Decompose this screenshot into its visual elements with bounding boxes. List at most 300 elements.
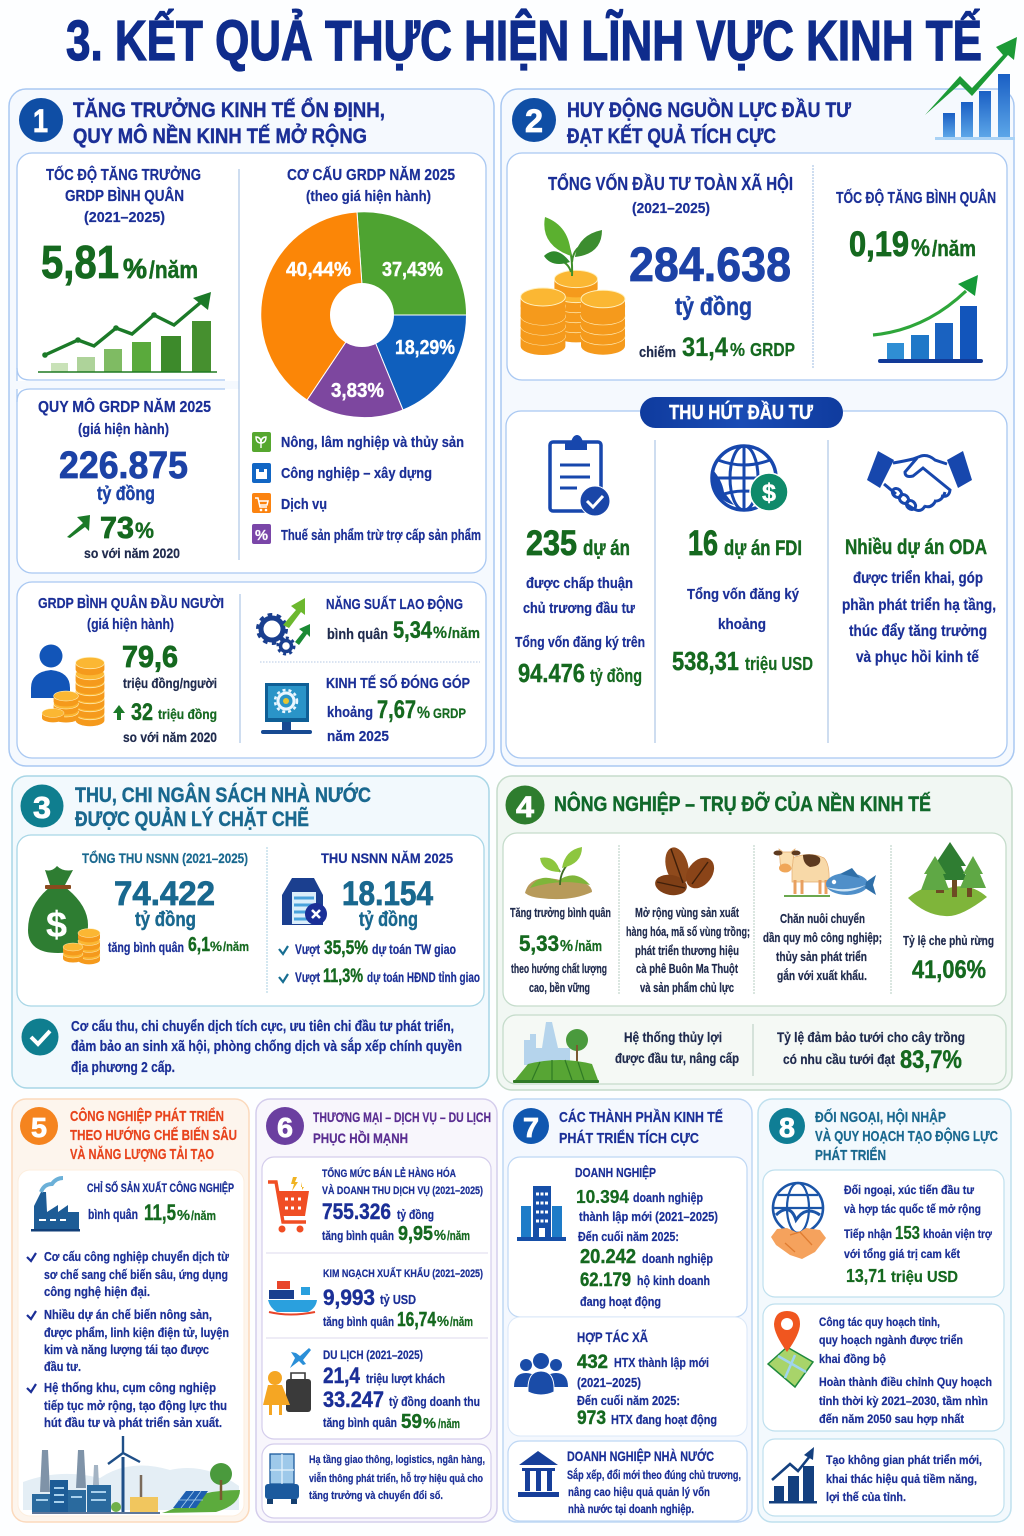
retail text: tăng bình quân [322, 1229, 394, 1243]
bullet list: Hệ thống khu, cụm công nghiệp [44, 1381, 216, 1395]
digital economy text: 7,67 [377, 696, 416, 724]
retail text: 755.326 [322, 1199, 391, 1224]
GRDP per capita block: GRDP BÌNH QUÂN ĐẦU NGƯỜI [38, 594, 224, 612]
export text: KIM NGẠCH XUẤT KHẨU (2021–2025) [323, 1267, 483, 1280]
pie chart: 40,44% [286, 259, 351, 281]
retail text: % [434, 1227, 446, 1244]
panel 5 heading: THEO HƯỚNG CHẾ BIẾN SÂU [70, 1126, 237, 1144]
state enterprises text: nhà nước tại doanh nghiệp. [568, 1504, 694, 1516]
total investment card: (2021–2025) [632, 201, 710, 217]
icon: irrigation landscape [513, 1022, 599, 1083]
gap between left cards [14, 169, 239, 560]
total investment card: TỔNG VỐN ĐẦU TƯ TOÀN XÃ HỘI [548, 173, 793, 194]
panel 6 heading: 6 [277, 1112, 293, 1143]
GRDP size block: QUY MÔ GRDP NĂM 2025 [38, 398, 211, 416]
2025 revenue text: THU NSNN NĂM 2025 [321, 850, 453, 866]
panel 6 heading [266, 1107, 491, 1146]
panel 8 heading: PHÁT TRIỂN [815, 1146, 886, 1164]
legend: Thuế sản phẩm trừ trợ cấp sản phẩm [281, 527, 481, 544]
industrial index text: bình quân [88, 1207, 138, 1222]
text: 16 FDI projects: 16 [688, 524, 718, 563]
lower card [17, 582, 486, 758]
main card [17, 153, 486, 573]
export text [323, 1267, 483, 1331]
panel 7 heading: CÁC THÀNH PHẦN KINH TẾ [559, 1109, 723, 1126]
development text: lợi thế của tỉnh. [826, 1490, 906, 1504]
icon: forest [908, 842, 987, 916]
panel 3 heading: ĐƯỢC QUẢN LÝ CHẶT CHẼ [75, 807, 309, 831]
digital economy text: năm 2025 [327, 728, 389, 745]
labour productivity text: /năm [448, 625, 480, 642]
export text: 16,74 [397, 1309, 437, 1331]
enterprises text: 20.242 [580, 1246, 636, 1268]
retail text: TỔNG MỨC BÁN LẺ HÀNG HÓA [322, 1167, 456, 1180]
text: irrigation: Tỷ lệ đảm bảo tưới cho cây trồng [777, 1029, 965, 1045]
foreign affairs text: triệu USD [891, 1269, 958, 1286]
text: agri growth: % [560, 938, 573, 955]
panel 5 background [12, 1099, 249, 1522]
text: 16 FDI projects: Tổng vốn đăng ký [687, 586, 800, 603]
panel 4 heading: NÔNG NGHIỆP – TRỤ ĐỠ CỦA NỀN KINH TẾ [554, 792, 931, 816]
text: coffee: hàng hóa, mã số vùng trồng; [626, 925, 750, 939]
icon: factory [31, 1178, 80, 1232]
text: 16 FDI projects: 538,31 [672, 646, 739, 676]
text: irrigation: có nhu cầu tưới đạt [783, 1051, 895, 1067]
total revenue text: TỔNG THU NSNN (2021–2025) [82, 849, 248, 866]
growth rate block: % [123, 253, 147, 284]
GRDP per capita block: 32 [131, 699, 153, 726]
legend [252, 432, 481, 544]
average growth block: /năm [932, 236, 976, 261]
panel 2 heading: HUY ĐỘNG NGUỒN LỰC ĐẦU TƯ [567, 98, 851, 122]
tourism text: triệu lượt khách [366, 1371, 445, 1386]
legend: % [255, 527, 268, 544]
enterprises text: doanh nghiệp [642, 1251, 713, 1266]
panel 1 heading [19, 98, 385, 148]
infrastructure text: viễn thông phát triển, hỗ trợ hiệu quả cho [309, 1472, 483, 1485]
panel 7 heading [513, 1108, 723, 1147]
tourism text: 59 [401, 1411, 422, 1433]
icon: gears and arrows [258, 598, 310, 654]
budget note text [71, 1019, 462, 1076]
text: agri growth: cao, bền vững [529, 981, 590, 995]
panel 5: industry [12, 1099, 249, 1522]
pie chart: 18,29% [395, 337, 455, 359]
text: ODA projects [842, 536, 996, 666]
infrastructure card [262, 1444, 491, 1518]
digital economy text [326, 674, 470, 745]
text: 16 FDI projects: triệu USD [745, 654, 813, 674]
2025 revenue text: tỷ đồng [359, 909, 418, 931]
panel 3 heading [20, 783, 371, 831]
industrial index text: % [177, 1207, 190, 1224]
text: livestock: thủy sản phát triển [776, 950, 867, 964]
panel 5 heading: CÔNG NGHIỆP PHÁT TRIỂN [70, 1107, 224, 1125]
text: livestock: dần quy mô công nghiệp; [763, 931, 882, 945]
tourism text: 21,4 [323, 1363, 361, 1388]
text: livestock [763, 912, 882, 983]
planning card [763, 1304, 1004, 1431]
growth rate block: TỐC ĐỘ TĂNG TRƯỞNG [46, 166, 201, 184]
pie chart: 37,43% [382, 259, 443, 281]
GRDP per capita block: so với năm 2020 [123, 729, 217, 745]
panel 4 heading [506, 786, 931, 824]
panel 2 heading: 2 [525, 103, 543, 139]
icon: monitor with gear [261, 683, 312, 734]
foreign affairs card [763, 1170, 1004, 1297]
panel 3 heading: THU, CHI NGÂN SÁCH NHÀ NƯỚC [75, 783, 371, 807]
digital economy text: GRDP [433, 705, 466, 721]
tourism text: 33.247 [323, 1387, 384, 1412]
trade card [262, 1157, 491, 1439]
pill label: attract investment: THU HÚT ĐẦU TƯ [669, 400, 813, 424]
tourism text: tăng bình quân [323, 1416, 397, 1430]
digital economy text: % [417, 703, 430, 722]
chart: blue bars with green arrow [873, 275, 983, 363]
icon: person with coins [31, 644, 104, 726]
text: ODA projects: thúc đẩy tăng trưởng [849, 623, 987, 640]
state enterprises text: Sắp xếp, đổi mới theo đúng chủ trương, [567, 1469, 741, 1482]
bullet list: kim và năng lượng tái tạo được [44, 1343, 209, 1357]
total investment card: % [730, 340, 745, 360]
text: ODA projects: Nhiều dự án ODA [845, 536, 987, 559]
text: 16 FDI projects [672, 524, 813, 676]
export text: % [437, 1313, 449, 1330]
panel 8 heading: ĐỐI NGOẠI, HỘI NHẬP [815, 1108, 946, 1126]
text: agri growth: /năm [575, 938, 602, 955]
enterprises card [508, 1157, 747, 1317]
panel 3 background [12, 776, 489, 1088]
panel 1: economic growth [9, 89, 494, 766]
foreign affairs text: với tổng giá trị cam kết [844, 1247, 960, 1261]
panel 4: agriculture [497, 776, 1012, 1090]
total revenue text [82, 849, 249, 956]
industrial index text [87, 1181, 234, 1225]
digital economy text: KINH TẾ SỐ ĐÓNG GÓP [326, 674, 470, 692]
retail text: /năm [447, 1228, 470, 1243]
icon: sprout on soil [525, 847, 592, 899]
tourism text: DU LỊCH (2021–2025) [323, 1348, 423, 1362]
text: irrigation: Hệ thống thủy lợi [624, 1029, 722, 1045]
infrastructure text: tăng trưởng và chuyển đổi số. [309, 1490, 443, 1502]
enterprises text: 10.394 [576, 1186, 630, 1207]
icon: cargo ship [268, 1281, 317, 1314]
panel 1 background [9, 89, 494, 766]
icon: people [514, 1353, 568, 1395]
average growth block: 0,19 [849, 225, 909, 264]
total revenue text: 74.422 [114, 875, 215, 913]
GRDP per capita block: triệu đồng [158, 706, 217, 722]
irrigation card [503, 1015, 1006, 1084]
GRDP size block: 226.875 [59, 445, 188, 487]
cooperatives text: 973 [577, 1408, 606, 1429]
panel 1 heading: QUY MÔ NỀN KINH TẾ MỞ RỘNG [73, 124, 367, 148]
cooperatives text: Đến cuối năm 2025: [577, 1393, 680, 1408]
text: forest cover: Tỷ lệ che phủ rừng [903, 933, 994, 948]
labour productivity text: NĂNG SUẤT LAO ĐỘNG [326, 595, 463, 613]
GRDP size block: tỷ đồng [97, 484, 155, 505]
text: irrigation: 83,7% [900, 1046, 962, 1074]
panel 4 heading: 4 [516, 791, 534, 824]
cooperatives text: 432 [577, 1352, 608, 1373]
retail text: 9,95 [398, 1223, 433, 1245]
legend: Công nghiệp – xây dựng [281, 465, 432, 482]
text: irrigation [615, 1024, 965, 1076]
text: coffee [626, 906, 750, 995]
pill label: attract investment [506, 397, 1007, 758]
panel 6 heading: THƯƠNG MẠI – DỊCH VỤ – DU LỊCH [313, 1109, 491, 1125]
budget card [17, 835, 484, 1006]
panel 2 heading: ĐẠT KẾT QUẢ TÍCH CỰC [567, 125, 776, 148]
state enterprises text [567, 1449, 741, 1516]
text: livestock: gắn với xuất khẩu. [777, 968, 867, 983]
icon: shopping cart [268, 1177, 309, 1232]
icon: document with x [282, 878, 327, 925]
icon: corner growth chart [925, 37, 1017, 140]
panel 7: economic sectors [503, 1099, 752, 1522]
GRDP per capita block: triệu đồng/người [123, 675, 217, 691]
total investment card: tỷ đồng [675, 293, 752, 321]
industry card [18, 1170, 244, 1516]
icon: globe with dollar [712, 446, 788, 511]
agriculture card [503, 833, 1006, 1006]
export text: 9,993 [323, 1285, 375, 1310]
icon: check circle [22, 1018, 58, 1056]
retail text: tỷ đồng [397, 1207, 434, 1222]
tourism text: tỷ đồng doanh thu [389, 1394, 480, 1409]
bullet list: Cơ cấu công nghiệp chuyển dịch từ [44, 1250, 230, 1264]
planning text: khai đồng bộ [819, 1352, 886, 1366]
panel 6: trade and tourism [256, 1099, 497, 1522]
icon: clipboard with check [550, 435, 610, 516]
2025 revenue text [279, 850, 480, 987]
growth rate block: 5,81 [41, 236, 119, 288]
GRDP size block: % [135, 518, 154, 543]
foreign affairs text: 13,71 [846, 1266, 886, 1286]
development text: khai thác hiệu quả tiềm năng, [826, 1472, 977, 1486]
state enterprises text: nâng cao hiệu quả quản lý vốn [568, 1487, 710, 1499]
text: 235 projects [515, 524, 645, 688]
infrastructure text: Hạ tầng giao thông, logistics, ngân hàng, [309, 1454, 485, 1466]
total revenue text: % [210, 938, 223, 954]
foreign affairs text: khoản viện trợ [923, 1227, 992, 1241]
average growth block: % [911, 235, 930, 262]
GRDP structure heading: CƠ CẤU GRDP NĂM 2025 [287, 167, 455, 184]
enterprises text: thành lập mới (2021–2025) [579, 1209, 718, 1224]
GRDP size block: so với năm 2020 [84, 545, 180, 561]
panel 8 heading [769, 1108, 998, 1164]
retail text: VÀ DOANH THU DỊCH VỤ (2021–2025) [322, 1184, 483, 1197]
text: coffee: và sản phẩm chủ lực [640, 981, 734, 995]
text: ODA projects: phần phát triển hạ tầng, [842, 597, 996, 614]
planning text: quy hoạch ngành được triển [819, 1333, 963, 1347]
cooperatives text: HTX thành lập mới [614, 1355, 709, 1370]
panel 7 heading: PHÁT TRIỂN TÍCH CỰC [559, 1129, 699, 1147]
bullet list: được phẩm, linh kiện điện tử, luyện [44, 1326, 229, 1340]
pie chart [261, 212, 467, 418]
GRDP size block: 73 [100, 510, 134, 545]
icon: money bag [28, 866, 100, 964]
text: ODA projects: được triển khai, góp [853, 570, 983, 587]
illustration: industry and renewable energy [23, 1436, 240, 1513]
text: 16 FDI projects: dự án FDI [724, 537, 802, 560]
labour productivity text: bình quân [327, 626, 388, 643]
icon: coffee beans [654, 845, 720, 898]
text: coffee: Mở rộng vùng sản xuất [635, 906, 740, 920]
bullet list: sơ chế sang chế biến sâu, ứng dụng [44, 1268, 228, 1282]
2025 revenue text: dự toán HĐND tỉnh giao [367, 970, 480, 985]
budget note text: đảm bảo an sinh xã hội, phòng chống dịch và sắp xếp chính quyền [71, 1037, 462, 1055]
panel 5 heading: 5 [31, 1112, 47, 1143]
panel 8 background [758, 1099, 1011, 1522]
panel 6 background [256, 1099, 497, 1522]
export text: tỷ USD [380, 1292, 416, 1307]
total investment card [507, 153, 1007, 380]
budget note text: Cơ cấu thu, chi chuyển dịch tích cực, ưu tiên chi đầu tư phát triển, [71, 1019, 454, 1035]
icon: cow and fish [774, 849, 876, 896]
text: 235 projects: tỷ đồng [590, 666, 642, 686]
average growth block [836, 189, 996, 264]
cooperatives text [577, 1328, 717, 1429]
text: irrigation: được đầu tư, nâng cấp [615, 1050, 739, 1066]
legend: Dịch vụ [281, 496, 327, 513]
bullet list: công nghệ hiện đại. [44, 1285, 150, 1299]
tourism text: /năm [438, 1416, 460, 1431]
enterprises text: hộ kinh doanh [637, 1273, 710, 1288]
development text: Tạo không gian phát triển mới, [826, 1453, 982, 1467]
panel 1 heading: TĂNG TRƯỞNG KINH TẾ ỔN ĐỊNH, [73, 98, 385, 122]
chart: growth bars and arrow [38, 292, 217, 372]
cooperatives text: (2021–2025) [577, 1375, 641, 1390]
cooperatives text: HỢP TÁC XÃ [577, 1328, 648, 1345]
foreign affairs text: Tiếp nhận [844, 1227, 892, 1241]
bullet list: Nhiều dự án chế biến nông sản, [44, 1308, 212, 1322]
enterprises text: đang hoạt động [580, 1294, 661, 1309]
panel 2 background [501, 89, 1014, 766]
icon: handshake [867, 451, 972, 511]
text: agri growth: 5,33 [519, 931, 559, 956]
panel 4 background [497, 776, 1012, 1090]
cooperatives text: HTX đang hoạt động [611, 1412, 717, 1427]
panel 7 heading: 7 [523, 1112, 539, 1143]
icon: money bag: $ [46, 904, 67, 945]
bullet list [27, 1250, 230, 1430]
2025 revenue text: 35,5% [324, 938, 368, 959]
enterprises text [575, 1165, 718, 1309]
panel 6 heading: PHỤC HỒI MẠNH [313, 1129, 408, 1146]
total revenue text: tăng bình quân [108, 940, 184, 955]
text: 235 projects: dự án [583, 537, 630, 560]
infrastructure text [309, 1454, 485, 1502]
icon: buildings [517, 1186, 566, 1241]
GRDP per capita block: 79,6 [122, 639, 178, 674]
state enterprises card [508, 1441, 747, 1521]
panel 2 heading [512, 98, 851, 148]
growth rate block: (2021–2025) [84, 210, 165, 226]
text: 235 projects: được chấp thuận [526, 575, 633, 592]
text: 16 FDI projects: khoảng [718, 616, 766, 633]
total investment card: GRDP [750, 340, 795, 360]
state enterprises text: DOANH NGHIỆP NHÀ NƯỚC [567, 1449, 714, 1464]
export text: /năm [450, 1314, 473, 1329]
icon: plant on coins [521, 217, 625, 355]
enterprises text: DOANH NGHIỆP [575, 1165, 656, 1180]
2025 revenue text: Vượt [295, 969, 320, 985]
tourism text: % [423, 1415, 436, 1432]
growth rate block [41, 166, 201, 288]
panel 3 heading: 3 [33, 790, 51, 825]
2025 revenue text: 18.154 [342, 875, 433, 913]
budget note text: địa phương 2 cấp. [71, 1060, 175, 1076]
enterprises text: 62.179 [580, 1270, 631, 1291]
text: agri growth: Tăng trưởng bình quân [510, 906, 611, 920]
panel 8: foreign affairs and planning [758, 1099, 1011, 1522]
enterprises text: Đến cuối năm 2025: [578, 1229, 679, 1244]
bullet list: tiếp tục mở rộng, tạo động lực thu [44, 1399, 227, 1413]
retail text [322, 1167, 483, 1245]
panel 2: investment mobilization [501, 37, 1017, 766]
development text [826, 1453, 982, 1504]
panel 1 heading: 1 [33, 103, 48, 139]
icon: globe with dollar: $ [762, 479, 776, 507]
industrial index text: CHỈ SỐ SẢN XUẤT CÔNG NGHIỆP [87, 1181, 234, 1195]
foreign affairs text: Đối ngoại, xúc tiến đầu tư [844, 1183, 974, 1197]
panel 8 heading: 8 [779, 1112, 795, 1143]
text: forest cover [903, 933, 994, 984]
growth rate block: /năm [149, 257, 198, 284]
total investment card: chiếm [639, 345, 676, 361]
GRDP per capita block [38, 594, 224, 745]
planning text [819, 1315, 992, 1426]
GRDP structure heading: (theo giá hiện hành) [306, 189, 431, 205]
foreign affairs text [844, 1183, 992, 1286]
icon: map pin [768, 1311, 813, 1387]
export text: tăng bình quân [323, 1315, 394, 1329]
GRDP per capita block: (giá hiện hành) [87, 617, 174, 633]
labour productivity text [326, 595, 480, 644]
GRDP size block: (giá hiện hành) [78, 422, 169, 438]
planning text: đến năm 2050 sau hợp nhất [819, 1412, 964, 1426]
labour productivity text: 5,34 [393, 617, 433, 644]
foreign affairs text: và hợp tác quốc tế mở rộng [844, 1202, 981, 1216]
total investment card: 284.638 [629, 239, 791, 292]
panel 3: state budget [12, 776, 489, 1088]
text: livestock: Chăn nuôi chuyển [780, 912, 865, 926]
text: 235 projects: Tổng vốn đăng ký trên [515, 634, 645, 651]
industrial index text: 11,5 [144, 1200, 176, 1225]
icon: globe and handshake [771, 1183, 826, 1259]
planning text: Hoàn thành điều chỉnh Quy hoạch [819, 1375, 992, 1389]
pie chart: 3,83% [331, 380, 384, 402]
bullet list: đầu tư. [44, 1360, 81, 1374]
text: coffee: cà phê Buôn Ma Thuột [636, 962, 739, 976]
icon: traveller, suitcase and plane [263, 1348, 311, 1415]
total revenue text: /năm [223, 939, 249, 954]
2025 revenue text: Vượt [295, 941, 320, 957]
text: agri growth [510, 906, 611, 995]
icon: truck [265, 1454, 299, 1504]
text: ODA projects: và phục hồi kinh tế [856, 649, 979, 666]
tourism text [323, 1348, 480, 1433]
text: 235 projects: 235 [526, 524, 577, 563]
planning text: tỉnh thời kỳ 2021–2030, tầm nhìn [819, 1394, 988, 1408]
text: agri growth: theo hướng chất lượng [511, 962, 607, 976]
text: 235 projects: chủ trương đầu tư [523, 600, 635, 617]
GRDP size block [38, 398, 211, 561]
panel 7 background [503, 1099, 752, 1522]
development card [763, 1439, 1004, 1516]
cooperatives card [508, 1317, 747, 1436]
